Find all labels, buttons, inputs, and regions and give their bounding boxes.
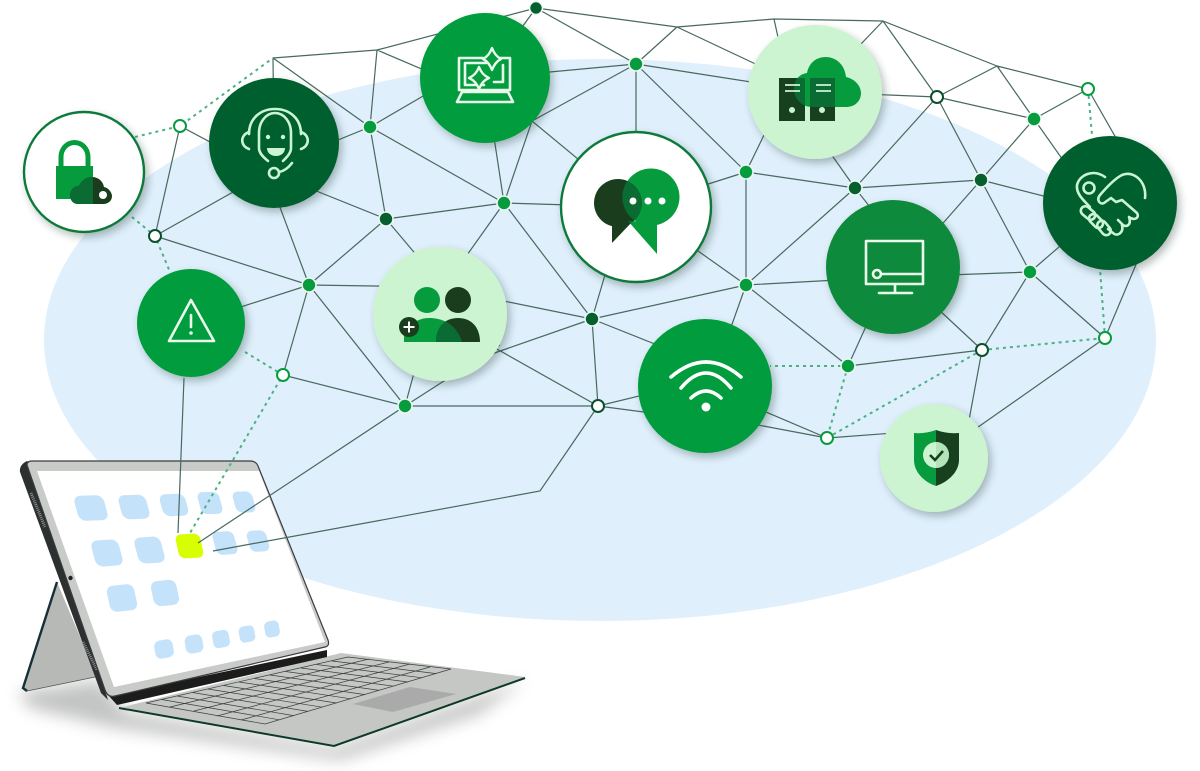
circle: support headset [209, 78, 339, 208]
circle: shield [880, 404, 988, 512]
highlighted lime app [175, 533, 204, 559]
icon: warning triangle [169, 300, 214, 341]
hinge [109, 650, 327, 705]
tablet app icons [73, 491, 281, 660]
icon: shield with check [914, 430, 959, 486]
icon: smiling agent with headset [242, 109, 308, 178]
soft shadow under the device [18, 680, 525, 760]
icon: two speech bubbles [594, 168, 680, 254]
network connection lines [132, 8, 1140, 551]
icon: handshake heart [1077, 173, 1145, 237]
circle: lock and cloud [24, 112, 144, 232]
icon: two people with plus badge [399, 287, 480, 342]
icon: wifi signal [671, 362, 741, 412]
circle: add people [373, 247, 507, 381]
tablet body [20, 461, 329, 700]
background blue ellipse [44, 59, 1156, 621]
icon: sparkling laptop [457, 48, 513, 102]
network nodes [149, 2, 1111, 444]
circle: monitor [826, 200, 960, 334]
keyboard base [119, 653, 525, 746]
kickstand [23, 582, 97, 691]
circle: laptop with sparkles [420, 13, 550, 143]
icon: desktop monitor [866, 241, 923, 293]
circle: wifi [638, 319, 772, 453]
circle: conversation bubbles [561, 132, 711, 282]
tablet with keyboard [18, 461, 525, 760]
circle: handshake [1043, 136, 1177, 270]
circle: cloud servers [748, 25, 882, 159]
icon: cloud and two server towers [779, 57, 861, 121]
circle: alert [137, 269, 245, 377]
icon: padlock with cloud [56, 142, 112, 204]
